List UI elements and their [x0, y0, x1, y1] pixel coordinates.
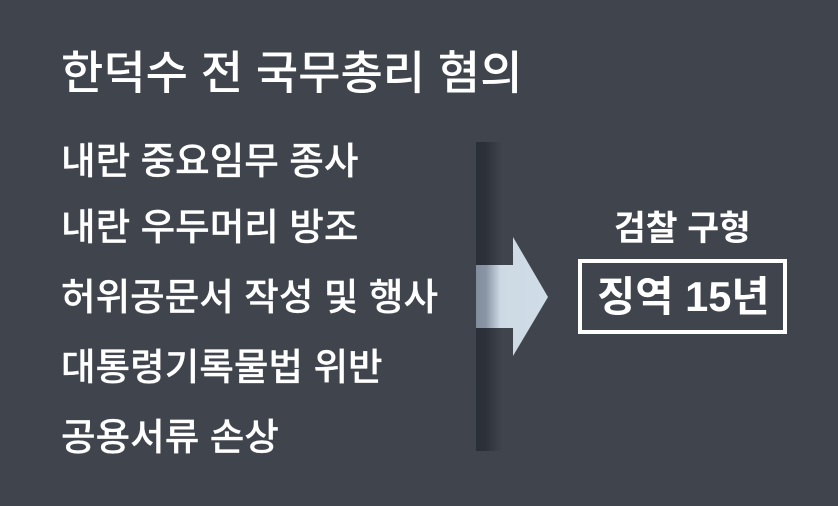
- sentence box: [578, 259, 787, 334]
- sentence value: 징역 15년: [597, 273, 770, 320]
- charge 4: 대통령기록물법 위반: [61, 346, 383, 388]
- divider bar with shadow: [476, 142, 502, 451]
- list of charges: [61, 140, 438, 458]
- sentence label: 검찰 구형: [614, 210, 751, 248]
- charge 3: 허위공문서 작성 및 행사: [61, 276, 438, 318]
- charge 2: 내란 우두머리 방조: [61, 206, 358, 248]
- charge 5: 공용서류 손상: [61, 416, 279, 458]
- title: 한덕수 전 국무총리 혐의: [61, 47, 523, 99]
- charge 1: 내란 중요임무 종사: [61, 140, 358, 182]
- icon: arrow: [476, 237, 548, 356]
